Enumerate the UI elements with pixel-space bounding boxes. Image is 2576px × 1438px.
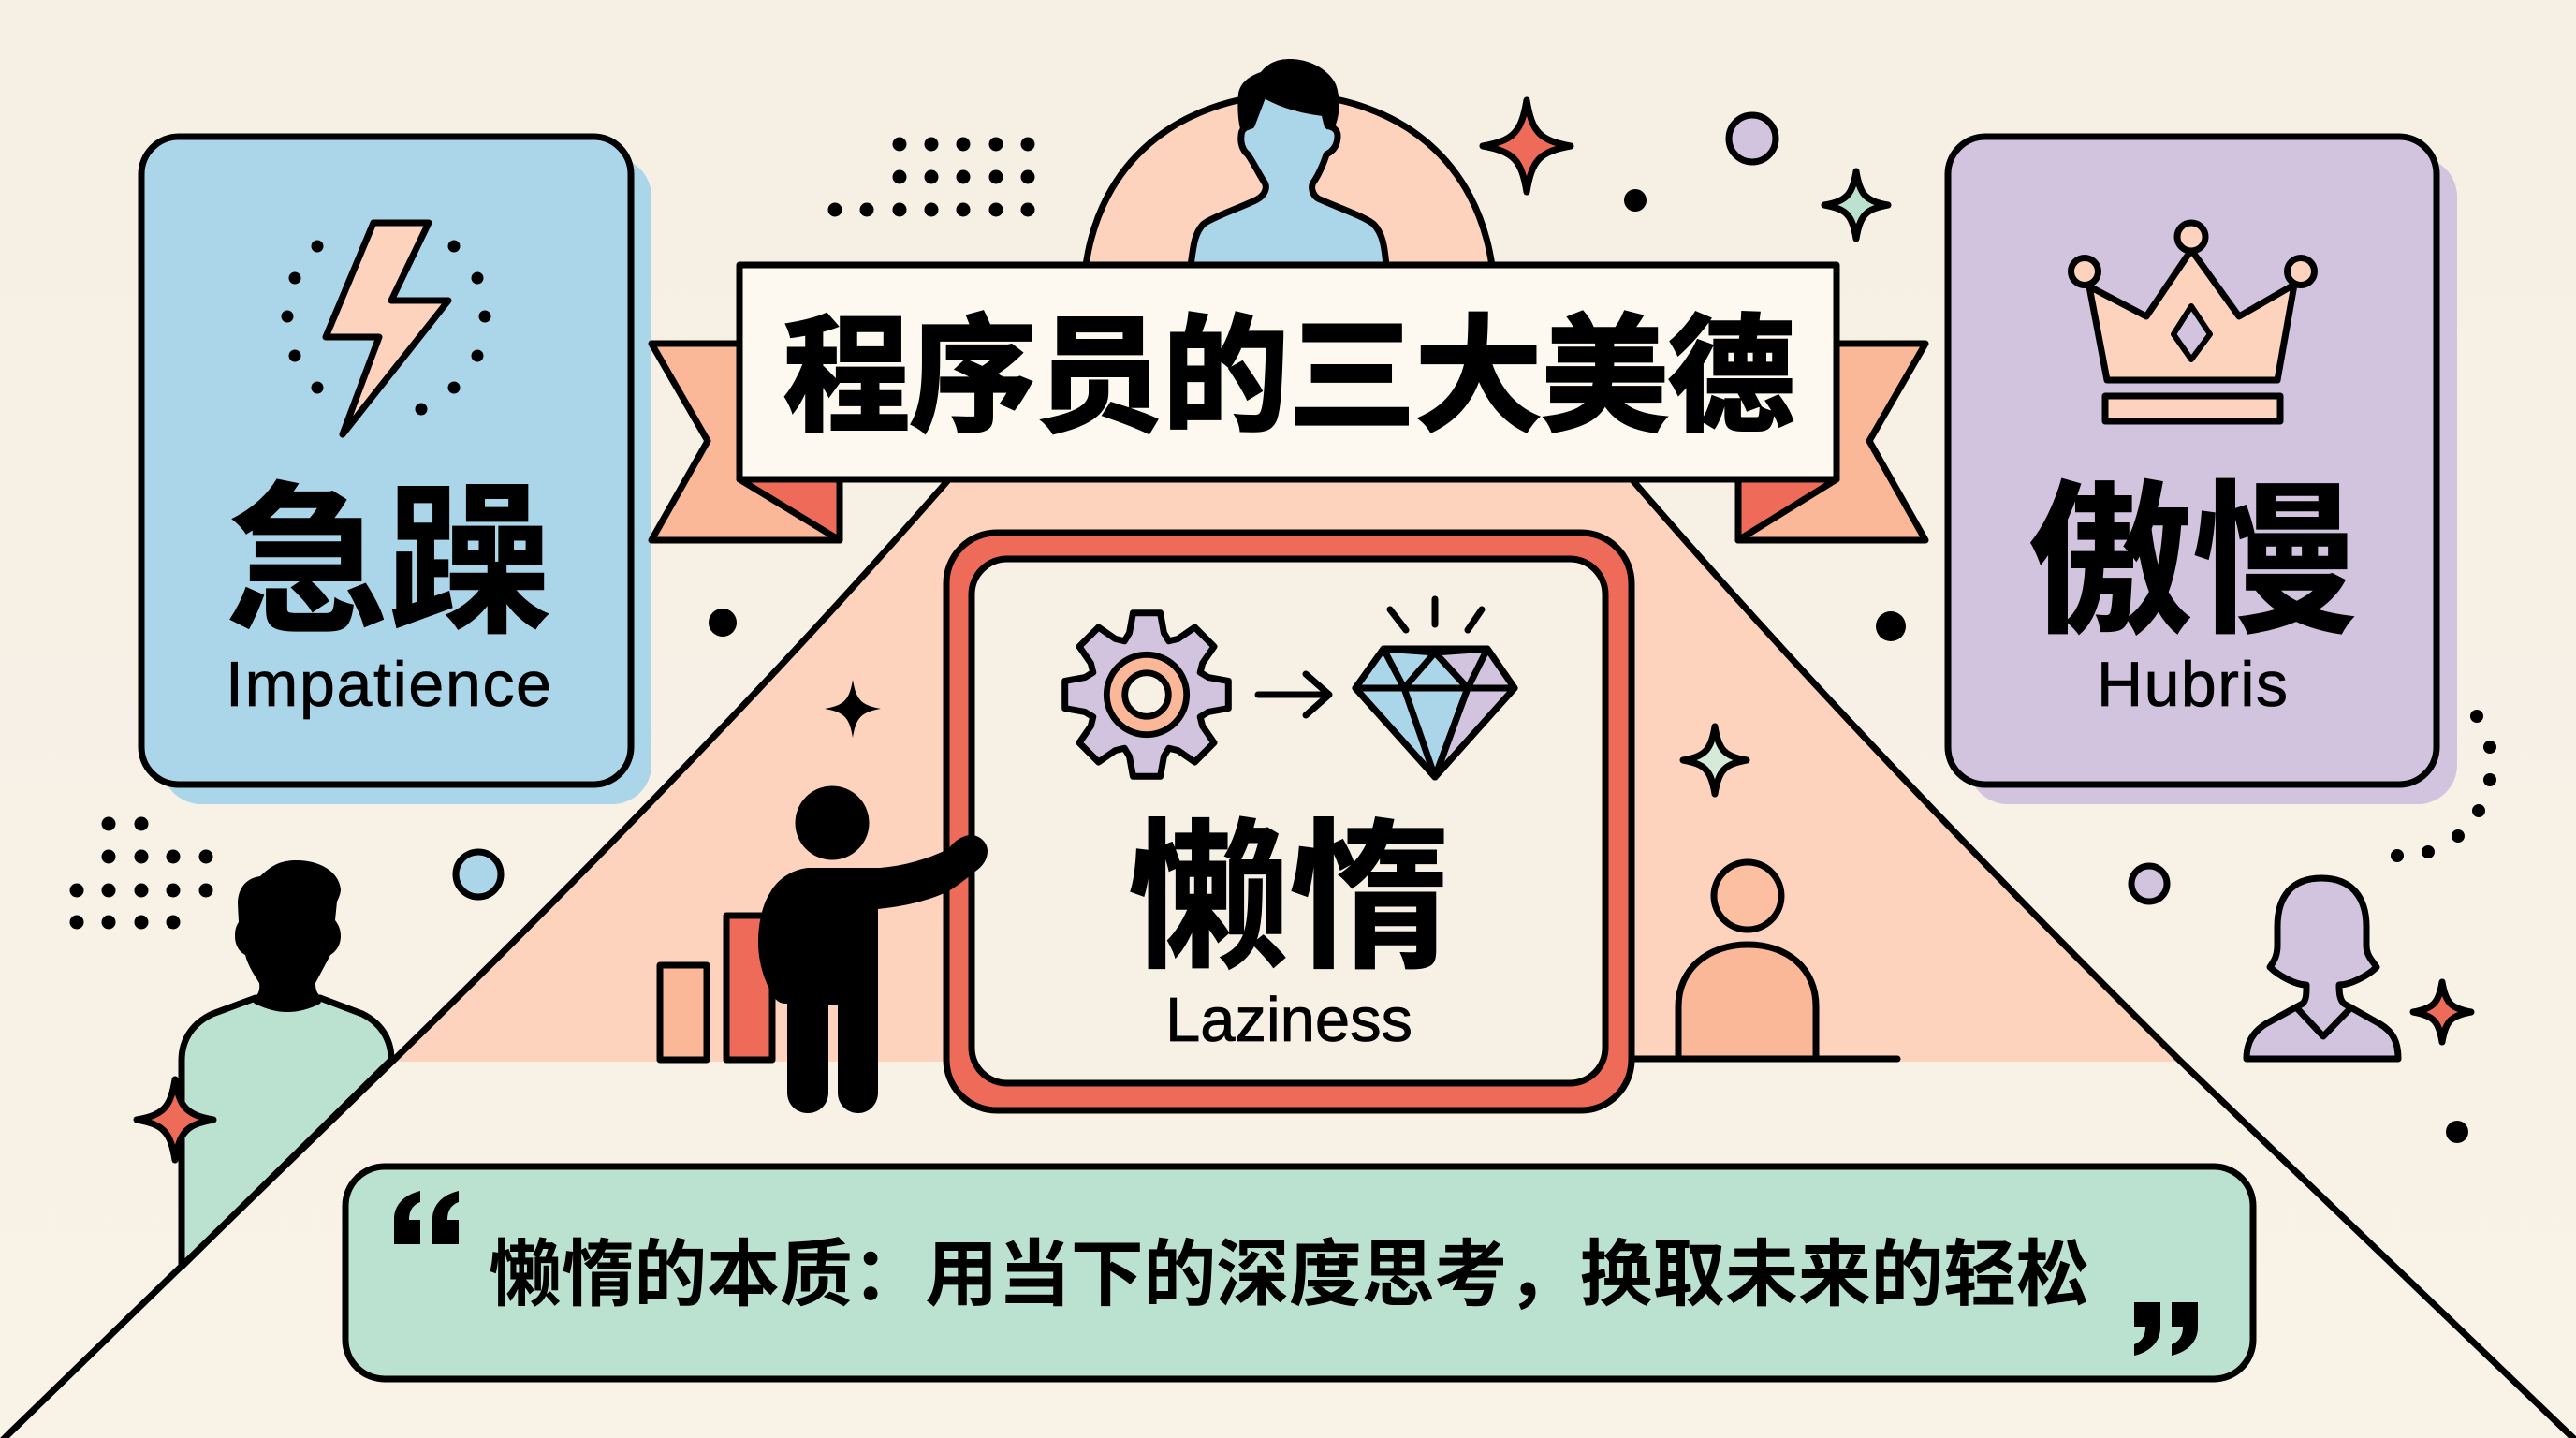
icon: opening quote mark: [394, 1191, 459, 1244]
dot grid: left: [69, 816, 213, 929]
star: red top: [1483, 100, 1571, 192]
pyramid right edge: [1633, 481, 2576, 1438]
heading: laziness: 懒惰: [1128, 809, 1450, 989]
panel card: [1948, 137, 2437, 785]
ribbon: left tail: [651, 344, 840, 540]
right peach person on ground line: [1633, 862, 1897, 1059]
panel card: [141, 137, 631, 785]
star: red left: [137, 1079, 213, 1160]
panel: laziness: [946, 533, 1632, 1110]
dome: [1086, 94, 1492, 266]
person bust: [1191, 94, 1386, 266]
heading: hubris: 傲慢: [2027, 471, 2357, 654]
ribbon: right tail: [1738, 344, 1925, 540]
heading: impatience: 急躁: [226, 471, 551, 653]
icon: gear: [1065, 613, 1228, 776]
label: hubris: Hubris: [2097, 649, 2288, 720]
icon: closing quote mark: [2134, 1302, 2198, 1356]
person hair: [1237, 59, 1339, 130]
panel shadow: [1969, 157, 2457, 804]
star: red bottom right: [2413, 982, 2471, 1042]
dot arc: right: [2391, 710, 2496, 862]
star: mint top right: [1824, 171, 1888, 239]
icon: diamond: [1355, 599, 1515, 777]
title: 程序员的三大美德: [783, 306, 1794, 448]
person head: [1714, 862, 1781, 930]
person body: [182, 998, 391, 1267]
callout box: [345, 1167, 2253, 1379]
person body: [1678, 945, 1816, 1059]
title banner: [739, 265, 1837, 479]
quote text: 懒惰的本质：用当下的深度思考，换取未来的轻松: [489, 1233, 2089, 1315]
star: mint center right: [1683, 726, 1747, 794]
arrow: [1258, 674, 1329, 715]
panel shadow: [162, 157, 651, 804]
top person in dome: [1086, 59, 1492, 266]
pyramid left edge: [0, 481, 947, 1438]
label: laziness: Laziness: [1165, 985, 1412, 1055]
ground line: [1633, 1056, 1897, 1062]
person head silhouette: [235, 860, 341, 1012]
dot grid: top center: [827, 137, 1035, 217]
peach pyramid background: [395, 481, 2180, 1062]
right lilac person: [2247, 878, 2398, 1059]
loose dots: [709, 189, 2468, 1143]
banner box: [739, 265, 1837, 479]
panel: hubris: [1948, 137, 2457, 804]
panel: impatience: [141, 137, 651, 804]
left person in mint shirt: [182, 860, 391, 1267]
star: black: [825, 680, 881, 738]
bar chart: [660, 916, 772, 1060]
quote callout: [345, 1167, 2253, 1379]
label: impatience: Impatience: [226, 649, 551, 720]
small circles: [456, 115, 2167, 902]
icon: crown: [2071, 223, 2314, 421]
inner card: [972, 559, 1605, 1083]
icon: lightning bolt: [281, 223, 490, 434]
presenter figure: [758, 786, 988, 1113]
outer red frame: [946, 533, 1632, 1110]
